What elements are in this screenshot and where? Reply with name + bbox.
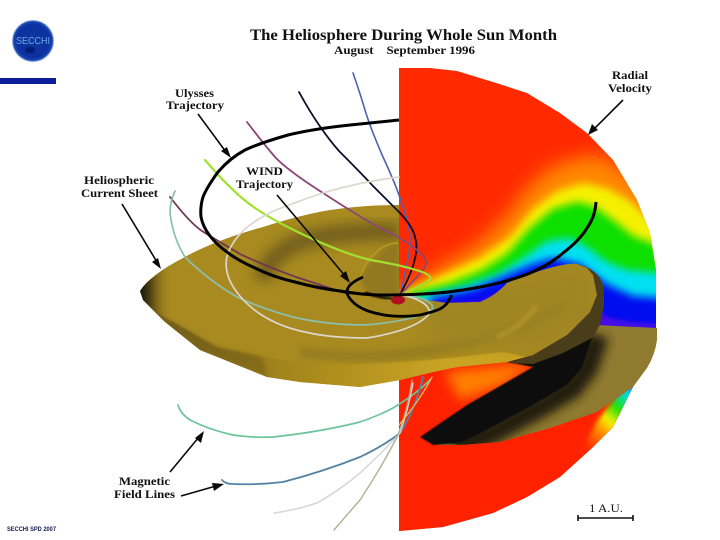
label: Heliospheric Current Sheet: Heliospheric bbox=[84, 173, 155, 187]
label: WIND Trajectory: WIND bbox=[246, 164, 283, 178]
field line: purple bbox=[247, 122, 426, 294]
label: WIND Trajectory bbox=[236, 164, 293, 191]
panel: heliospheric current sheet (gold surface) bbox=[130, 200, 665, 450]
title: The Heliosphere During Whole Sun Month bbox=[250, 27, 557, 44]
logo: SECCHI globe: SECCHI bbox=[16, 36, 50, 47]
scale bar: 1 A.U. bbox=[578, 501, 633, 521]
magnetic field lines bbox=[170, 73, 432, 530]
field line: gold over wedge bbox=[399, 377, 432, 425]
arrow: current sheet bbox=[122, 204, 161, 269]
label: Magnetic Field Lines: Magnetic bbox=[119, 474, 171, 488]
header accent bar bbox=[0, 78, 56, 84]
left dark rim texture bbox=[166, 318, 268, 376]
right surface tint bbox=[428, 264, 596, 336]
field line: maroon bbox=[170, 197, 345, 293]
lower right sheet lobe bbox=[437, 325, 657, 445]
panel: radial velocity wedge bbox=[399, 68, 656, 531]
black underside of the curl bbox=[420, 332, 592, 445]
label: Magnetic Field Lines: Field Lines bbox=[114, 487, 175, 501]
central dome bbox=[360, 243, 399, 296]
field line: lower blue bbox=[222, 377, 423, 484]
footer credit: SECCHI SPD 2007 bbox=[7, 527, 57, 533]
label: Ulysses Trajectory: Ulysses bbox=[175, 86, 214, 100]
lower bright rim bbox=[148, 305, 527, 387]
label: Ulysses Trajectory bbox=[166, 86, 224, 112]
WIND trajectory bbox=[347, 277, 452, 316]
label: WIND Trajectory: Trajectory bbox=[236, 177, 293, 191]
field line: lower tan bbox=[334, 380, 412, 530]
field line: slate blue bbox=[353, 73, 410, 293]
label: Radial Velocity: Velocity bbox=[608, 81, 652, 95]
arrow: WIND bbox=[277, 195, 350, 283]
dark left tip bbox=[140, 268, 166, 322]
arrow: radial velocity bbox=[588, 100, 623, 135]
field line: lower green bbox=[178, 380, 430, 437]
label: Radial Velocity bbox=[608, 68, 652, 95]
arrow: Ulysses bbox=[198, 114, 231, 158]
arrow: to lower blue line bbox=[181, 483, 224, 496]
label: Ulysses Trajectory: Trajectory bbox=[166, 98, 224, 112]
darker band near the rim bbox=[300, 342, 473, 361]
dome shadow bbox=[365, 292, 392, 299]
label: Radial Velocity: Radial bbox=[612, 68, 649, 82]
field line: lime bbox=[205, 160, 430, 295]
arrow: to lower green line bbox=[170, 431, 204, 472]
label: Magnetic Field Lines bbox=[114, 474, 175, 501]
Ulysses trajectory bbox=[201, 120, 596, 295]
sun bbox=[391, 296, 405, 304]
field line: lower grey bbox=[274, 383, 413, 513]
curl lip rim bbox=[507, 264, 604, 364]
main sheet top surface bbox=[140, 205, 597, 387]
label: Heliospheric Current Sheet bbox=[81, 173, 158, 200]
field line: teal bbox=[170, 191, 432, 325]
subtitle: August September 1996 bbox=[334, 45, 475, 57]
field line: pale grey to cream bbox=[226, 177, 430, 338]
highlight streak bbox=[497, 306, 536, 337]
dome outline bbox=[360, 243, 398, 277]
logo: SECCHI globe bbox=[12, 20, 54, 62]
inner dark ring bbox=[262, 232, 399, 280]
field line: dark navy bbox=[299, 92, 416, 293]
scale bar: 1 A.U.: 1 A.U. bbox=[589, 501, 623, 515]
label: Heliospheric Current Sheet: Current Sheet bbox=[81, 186, 158, 200]
